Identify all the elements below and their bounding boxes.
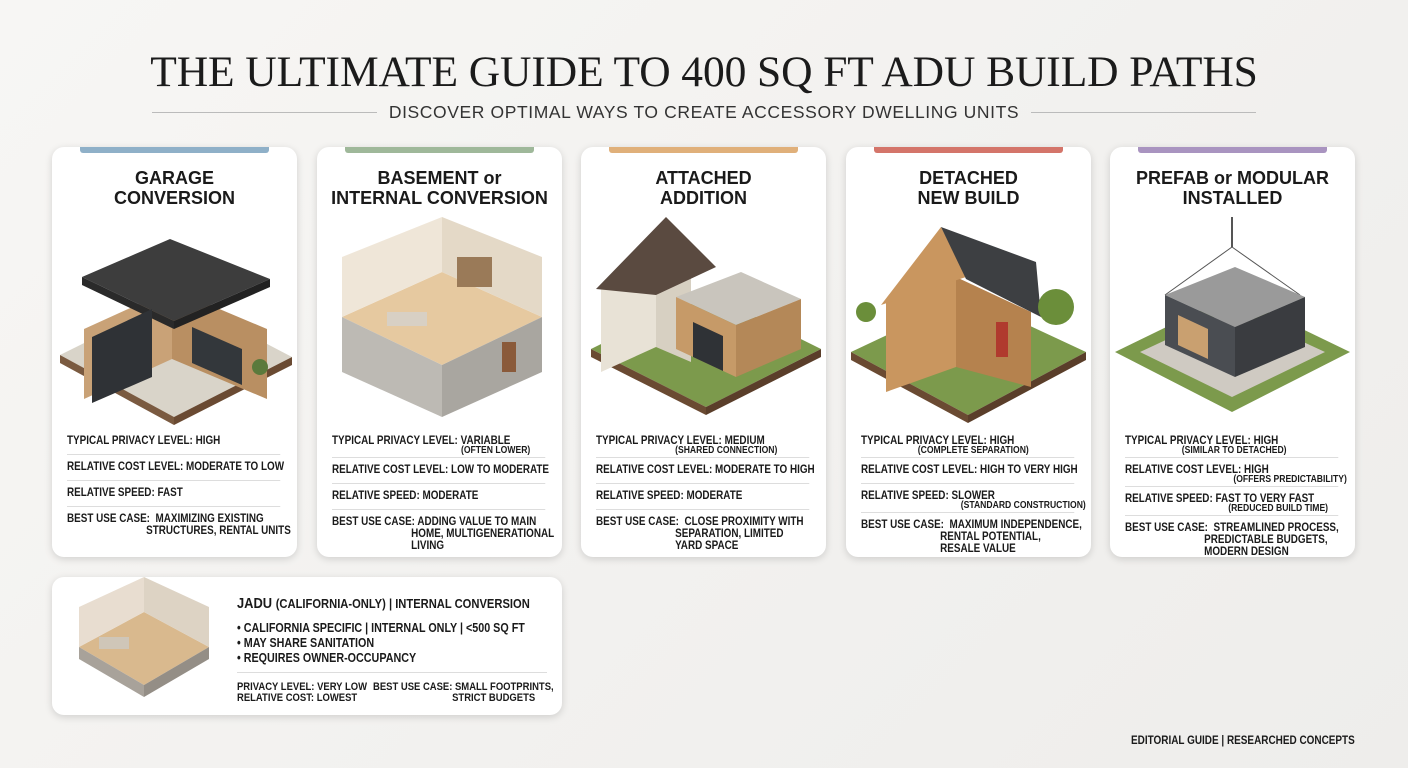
stats: basement: LIVING xyxy=(411,540,444,552)
title: THE ULTIMATE GUIDE TO 400 SQ FT ADU BUILD PATHS xyxy=(150,48,1258,96)
heading: attached: ADDITION xyxy=(660,188,747,208)
jadu stats: RELATIVE COST: LOWEST xyxy=(237,692,357,704)
stats: attached: SEPARATION, LIMITED xyxy=(675,528,784,540)
panel: attached addition xyxy=(581,147,826,557)
stats: detached: (COMPLETE SEPARATION) xyxy=(918,445,1029,456)
heading: detached xyxy=(918,168,1020,208)
heading: garage conversion: CONVERSION xyxy=(114,188,235,208)
stats: garage: STRUCTURES, RENTAL UNITS xyxy=(146,525,291,537)
heading: detached: NEW BUILD xyxy=(918,188,1020,208)
illustration: crane module xyxy=(1115,217,1350,412)
panel: JADU xyxy=(52,577,562,715)
stats: attached: BEST USE CASE: CLOSE PROXIMITY WITH xyxy=(596,516,804,528)
stats: attached: RELATIVE SPEED: MODERATE xyxy=(596,490,742,502)
heading: attached xyxy=(655,168,752,208)
panel: JADU: STRICT BUDGETS xyxy=(452,692,535,704)
stats: garage xyxy=(67,435,291,537)
stats: garage: RELATIVE COST LEVEL: MODERATE TO LOW xyxy=(67,461,284,473)
stats: garage: TYPICAL PRIVACY LEVEL: HIGH xyxy=(67,435,220,447)
heading: garage conversion xyxy=(114,168,235,208)
stats: basement: TYPICAL PRIVACY LEVEL: VARIABLE xyxy=(332,435,510,447)
stats: detached: TYPICAL PRIVACY LEVEL: HIGH xyxy=(861,435,1014,447)
panel: detached new build xyxy=(846,147,1091,557)
stats: prefab: RELATIVE SPEED: FAST TO VERY FAST xyxy=(1125,493,1314,505)
stats: attached: (SHARED CONNECTION) xyxy=(675,445,777,456)
jadu bullets: • MAY SHARE SANITATION xyxy=(237,636,374,650)
stats: prefab: (REDUCED BUILD TIME) xyxy=(1228,503,1328,514)
stats: prefab: RELATIVE COST LEVEL: HIGH xyxy=(1125,464,1269,476)
stats: basement: HOME, MULTIGENERATIONAL xyxy=(411,528,554,540)
stats: detached: BEST USE CASE: MAXIMUM INDEPENDENCE, xyxy=(861,519,1082,531)
panel: basement conversion xyxy=(317,147,562,557)
panel: prefab modular xyxy=(1110,147,1355,557)
illustration: cutaway interior xyxy=(342,217,542,417)
illustration: garage xyxy=(60,239,292,425)
subtitle: DISCOVER OPTIMAL WAYS TO CREATE ACCESSORY DWELLING UNITS xyxy=(389,102,1019,122)
heading: prefab: INSTALLED xyxy=(1183,188,1282,208)
stats: prefab: PREDICTABLE BUDGETS, xyxy=(1204,534,1328,546)
footer: EDITORIAL GUIDE | RESEARCHED CONCEPTS xyxy=(1131,733,1355,747)
stats: basement xyxy=(332,435,554,552)
panel: JADU: BEST USE CASE: SMALL FOOTPRINTS, xyxy=(373,681,554,693)
stats: prefab xyxy=(1125,435,1347,558)
stats: prefab: MODERN DESIGN xyxy=(1204,546,1289,558)
heading: basement xyxy=(331,168,548,208)
stats: attached: YARD SPACE xyxy=(675,540,738,552)
jadu stats xyxy=(237,681,367,704)
stats: prefab: (OFFERS PREDICTABILITY) xyxy=(1233,474,1347,485)
stats: prefab: TYPICAL PRIVACY LEVEL: HIGH xyxy=(1125,435,1278,447)
illustration: detached cottage xyxy=(851,227,1086,423)
jadu stats: PRIVACY LEVEL: VERY LOW xyxy=(237,681,367,693)
stats: detached: RELATIVE SPEED: SLOWER xyxy=(861,490,995,502)
stats: detached: RESALE VALUE xyxy=(940,543,1016,555)
stats: basement: RELATIVE SPEED: MODERATE xyxy=(332,490,478,502)
stats: detached: (STANDARD CONSTRUCTION) xyxy=(961,500,1086,511)
heading: attached: ATTACHED xyxy=(655,168,752,188)
stats: detached: RENTAL POTENTIAL, xyxy=(940,531,1041,543)
heading: detached: DETACHED xyxy=(919,168,1018,188)
heading: prefab: PREFAB or MODULAR xyxy=(1136,168,1329,188)
jadu bullets: • CALIFORNIA SPECIFIC | INTERNAL ONLY | <500 SQ FT xyxy=(237,621,525,635)
illustration: JADU room xyxy=(79,577,209,697)
stats: basement: BEST USE CASE: ADDING VALUE TO MAIN xyxy=(332,516,536,528)
stats: garage: BEST USE CASE: MAXIMIZING EXISTING xyxy=(67,513,264,525)
stats: basement: (OFTEN LOWER) xyxy=(461,445,530,456)
stats: prefab: (SIMILAR TO DETACHED) xyxy=(1182,445,1287,456)
jadu bullets xyxy=(237,621,525,665)
stats: garage: RELATIVE SPEED: FAST xyxy=(67,487,183,499)
heading: prefab xyxy=(1136,168,1329,208)
stats: attached: TYPICAL PRIVACY LEVEL: MEDIUM xyxy=(596,435,765,447)
jadu bullets: • REQUIRES OWNER-OCCUPANCY xyxy=(237,651,416,665)
stats: attached xyxy=(596,435,815,552)
stats: attached: RELATIVE COST LEVEL: MODERATE TO HIGH xyxy=(596,464,815,476)
stats: prefab: BEST USE CASE: STREAMLINED PROCESS, xyxy=(1125,522,1339,534)
stats: basement: RELATIVE COST LEVEL: LOW TO MODERATE xyxy=(332,464,549,476)
panel: garage conversion xyxy=(52,147,297,557)
jadu heading: JADU (CALIFORNIA-ONLY) | INTERNAL CONVERSION xyxy=(237,595,530,612)
stats: detached: RELATIVE COST LEVEL: HIGH TO VERY HIGH xyxy=(861,464,1078,476)
heading: garage conversion: GARAGE xyxy=(135,168,214,188)
illustration: attached addition xyxy=(591,217,821,415)
stats: detached xyxy=(861,435,1086,555)
heading: basement: INTERNAL CONVERSION xyxy=(331,188,548,208)
heading: basement: BASEMENT or xyxy=(377,168,502,188)
